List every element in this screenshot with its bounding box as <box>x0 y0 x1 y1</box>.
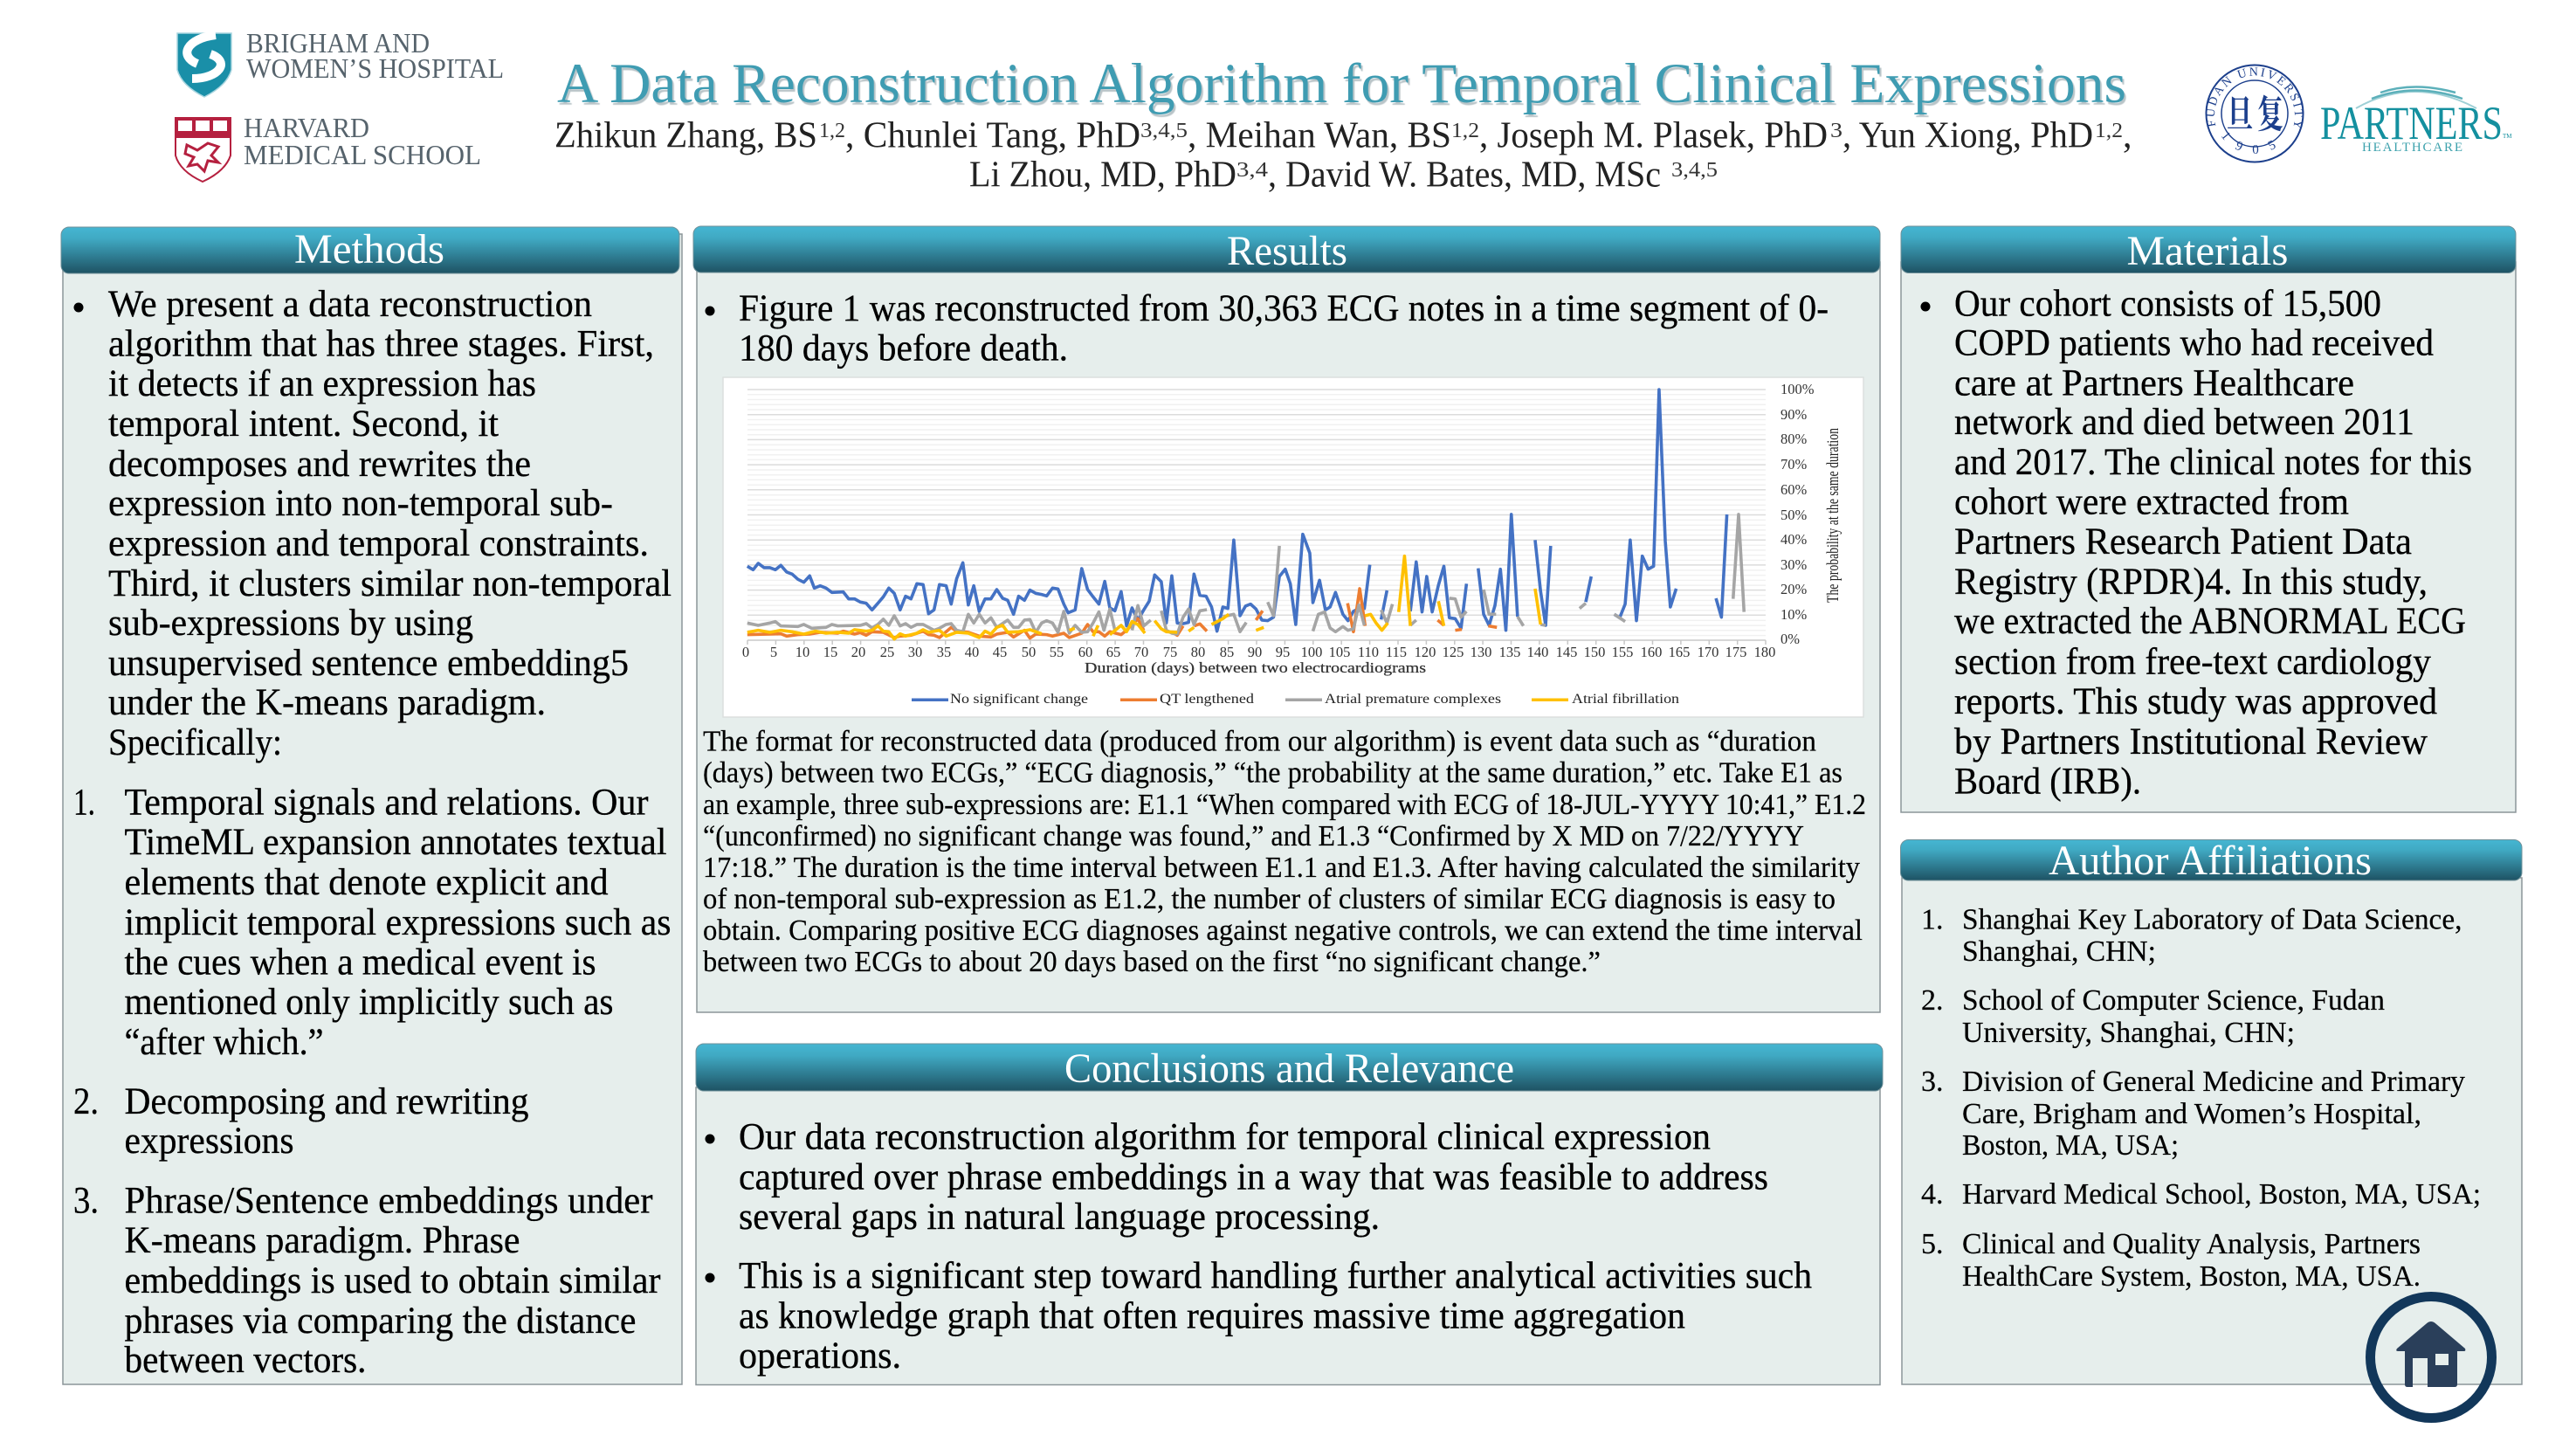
text block: item 3 embeddings: phrases via comparing the distance <box>124 1301 636 1342</box>
affiliation list: Division of General Medicine and Primary <box>1962 1066 2465 1098</box>
x axis: 10 <box>796 644 809 660</box>
text block: materials: Registry (RPDR)4. In this study, <box>1954 562 2428 603</box>
authors: 3,4 <box>1236 159 1268 182</box>
x axis: 160 <box>1641 644 1662 660</box>
x axis: 125 <box>1443 644 1464 660</box>
authors: 1,2 <box>2095 120 2123 142</box>
text block: results paragraph: between two ECGs to about 20 days based on the first “no significant change.” <box>703 946 1601 978</box>
heading: Methods <box>61 226 679 273</box>
panel: Methods <box>61 226 682 1384</box>
text block: methods intro: Specifically: <box>108 722 282 763</box>
text block: item 2 decomposing <box>73 1081 529 1162</box>
chart legend <box>912 692 1679 707</box>
logo: Harvard Medical School <box>175 112 481 182</box>
text block: conclusion one <box>706 1116 1768 1238</box>
x axis: 95 <box>1276 644 1290 660</box>
text block: results paragraph: (days) between two ECGs,” “ECG diagnosis,” “the probability at the same duration,” etc. Take E1 as <box>703 756 1842 790</box>
text block: results bullet: 180 days before death. <box>739 328 1068 369</box>
x axis: 150 <box>1584 644 1605 660</box>
authors: 3,4,5 <box>1671 159 1718 182</box>
panel: Materials <box>1901 226 2516 812</box>
logo: Brigham and Women's Hospital: WOMEN’S HOSPITAL <box>246 52 504 84</box>
authors: , Joseph M. Plasek, PhD <box>1479 115 1828 155</box>
text block: materials: care at Partners Healthcare <box>1954 363 2354 404</box>
authors: , David W. Bates, MD, MSc <box>1268 155 1661 196</box>
logo: Fudan University seal: FUDAN UNIVERSITY <box>2208 67 2302 128</box>
affiliation list: School of Computer Science, Fudan <box>1962 984 2385 1017</box>
x axis: 145 <box>1556 644 1577 660</box>
panel: Conclusions and Relevance <box>696 1044 1883 1385</box>
text block: conclusion two <box>706 1256 1812 1377</box>
logo: Partners HealthCare: TM <box>2503 133 2512 140</box>
text block: methods intro: it detects if an expression has <box>108 363 536 404</box>
affiliation list: 5. <box>1921 1228 1944 1260</box>
authors: , Yun Xiong, PhD <box>1842 115 2093 155</box>
authors: , Chunlei Tang, PhD <box>845 115 1140 155</box>
y axis: 20% <box>1780 581 1808 597</box>
text block: results paragraph: of non-temporal sub-expression as E1.2, the number of clusters of similar ECG diagnosis is easy to <box>703 883 1836 915</box>
x axis: 20 <box>851 644 865 660</box>
text block: conclusion one: captured over phrase embeddings in a way that was feasible to address <box>739 1156 1768 1198</box>
text block: materials: COPD patients who had received <box>1954 323 2434 363</box>
text block: materials: network and died between 2011 <box>1954 402 2414 443</box>
x axis: 15 <box>823 644 837 660</box>
affiliation list: Boston, MA, USA; <box>1962 1129 2179 1162</box>
text block: materials: Partners Research Patient Data <box>1954 521 2412 562</box>
text block: results paragraph: 17:18.” The duration is the time interval between E1.1 and E1.3. After having calculated the similarity <box>703 852 1860 884</box>
text block: materials <box>1921 283 2472 802</box>
text block: materials: and 2017. The clinical notes for this <box>1954 442 2472 483</box>
x axis: 35 <box>937 644 951 660</box>
logo: Fudan University seal: 旦 <box>2227 93 2253 136</box>
authors: Li Zhou, MD, PhD <box>969 155 1236 196</box>
x axis: 25 <box>880 644 894 660</box>
text block: methods intro: sub-expressions by using <box>108 603 473 644</box>
text block: item 3 embeddings: Phrase/Sentence embeddings under <box>124 1181 653 1221</box>
text block: conclusion one: several gaps in natural language processing. <box>739 1197 1380 1238</box>
y axis: The probability at the same duration <box>1824 428 1842 603</box>
y axis: 70% <box>1780 456 1808 473</box>
logo: Partners HealthCare: HEALTHCARE <box>2362 141 2462 155</box>
authors: Zhikun Zhang, BS <box>554 115 817 155</box>
y axis: 30% <box>1780 556 1808 573</box>
x axis: 100 <box>1301 644 1322 660</box>
logo: Harvard Medical School: HARVARD <box>244 112 369 143</box>
authors <box>554 115 2132 196</box>
text block: methods intro: algorithm that has three stages. First, <box>108 323 654 365</box>
x axis: 105 <box>1329 644 1350 660</box>
text block: item 1 temporal signals: the cues when a medical event is <box>124 942 596 983</box>
heading: Author Affiliations: Author Affiliations <box>2049 838 2372 884</box>
text block: methods intro: under the K-means paradigm. <box>108 682 546 723</box>
text block: item 3 embeddings: between vectors. <box>124 1340 367 1381</box>
affiliation list: 3. <box>1921 1066 1944 1098</box>
affiliation list: Shanghai, CHN; <box>1962 935 2156 968</box>
logo: Fudan University seal <box>2206 65 2304 162</box>
affiliation list: HealthCare System, Boston, MA, USA. <box>1962 1260 2421 1293</box>
logo: Harvard Medical School: MEDICAL SCHOOL <box>244 139 481 170</box>
affiliation list <box>1921 903 2481 1293</box>
title: A Data Reconstruction Algorithm for Temporal Clinical Expressions <box>557 52 2126 115</box>
text block: materials: by Partners Institutional Review <box>1954 721 2428 762</box>
affiliation list: 4. <box>1921 1178 1944 1211</box>
text block: item 3 embeddings: 3. <box>73 1181 99 1221</box>
affiliation list: Shanghai Key Laboratory of Data Science, <box>1962 903 2462 936</box>
text block: methods intro: expression and temporal constraints. <box>108 523 649 564</box>
line chart: probability by duration <box>723 377 1863 717</box>
logo: Fudan University seal: 复 <box>2257 93 2283 136</box>
x axis: 85 <box>1220 644 1234 660</box>
x axis: 165 <box>1669 644 1690 660</box>
x axis: 65 <box>1106 644 1120 660</box>
panel: Results <box>693 226 1880 1012</box>
text block: item 2 decomposing: expressions <box>124 1121 293 1162</box>
affiliation list: Clinical and Quality Analysis, Partners <box>1962 1228 2421 1260</box>
authors: , Meihan Wan, BS <box>1188 115 1451 155</box>
x axis: 5 <box>770 644 777 660</box>
chart legend: QT lengthened <box>1160 692 1254 707</box>
text block: results paragraph: an example, three sub-expressions are: E1.1 “When compared with ECG of 18-JUL-YYYY 10:41,” E1.2 <box>703 789 1866 821</box>
y axis: 10% <box>1780 606 1808 623</box>
affiliation list: University, Shanghai, CHN; <box>1962 1017 2295 1049</box>
icon: home button <box>2370 1296 2492 1418</box>
x axis: 50 <box>1022 644 1036 660</box>
heading: Author Affiliations <box>1900 838 2522 884</box>
y axis: 80% <box>1780 431 1808 447</box>
text block: methods intro: expression into non-temporal sub- <box>108 483 613 524</box>
text block: item 3 embeddings: K-means paradigm. Phrase <box>124 1220 520 1261</box>
text block: item 3 embeddings <box>73 1181 660 1381</box>
x axis: 115 <box>1386 644 1407 660</box>
logo: Brigham and Women's Hospital <box>177 27 504 97</box>
text block: item 3 embeddings: embeddings is used to obtain similar <box>124 1260 660 1301</box>
authors: , <box>2123 115 2132 155</box>
authors: 1,2 <box>819 120 845 142</box>
heading: Materials <box>1901 226 2516 274</box>
heading: Conclusions and Relevance: Conclusions and Relevance <box>1064 1045 1514 1092</box>
text block: methods intro: unsupervised sentence embedding5 <box>108 643 629 684</box>
y axis: 40% <box>1780 531 1808 548</box>
x axis: 155 <box>1612 644 1633 660</box>
y axis: 100% <box>1780 381 1815 397</box>
text block: results paragraph: The format for reconstructed data (produced from our algorithm) is event data such as “duration <box>703 725 1816 758</box>
affiliation list: 1. <box>1921 903 1944 936</box>
heading: Materials: Materials <box>2127 228 2288 274</box>
text block: item 1 temporal signals: elements that denote explicit and <box>124 862 608 903</box>
text block: results paragraph: obtain. Comparing positive ECG diagnoses against negative controls, we can extend the time interval <box>703 914 1863 947</box>
logo: Brigham and Women's Hospital: BRIGHAM AND <box>246 27 430 59</box>
heading: Results: Results <box>1227 228 1347 274</box>
x axis: 60 <box>1078 644 1092 660</box>
x axis: 135 <box>1499 644 1520 660</box>
text block: item 1 temporal signals: implicit temporal expressions such as <box>124 902 671 943</box>
chart legend: No significant change <box>950 692 1088 707</box>
y axis: 50% <box>1780 507 1808 523</box>
x axis: 120 <box>1415 644 1436 660</box>
affiliation list: Harvard Medical School, Boston, MA, USA; <box>1962 1178 2481 1211</box>
text block: results bullet: Figure 1 was reconstructed from 30,363 ECG notes in a time segment of 0- <box>739 288 1829 329</box>
x axis: 70 <box>1134 644 1148 660</box>
text block: item 1 temporal signals: TimeML expansion annotates textual <box>124 822 667 863</box>
text block: materials: Board (IRB). <box>1954 762 2141 802</box>
text block: item 1 temporal signals: mentioned only implicitly such as <box>124 982 613 1023</box>
series: lines <box>747 390 1744 639</box>
x axis: 140 <box>1527 644 1548 660</box>
text block: item 1 temporal signals: “after which.” <box>124 1022 323 1063</box>
text block: methods intro: We present a data reconstruction <box>108 284 592 325</box>
x axis: 45 <box>993 644 1007 660</box>
authors: 3 <box>1830 120 1842 142</box>
affiliation list: Care, Brigham and Women’s Hospital, <box>1962 1098 2421 1130</box>
y axis <box>1780 381 1842 647</box>
x axis: 55 <box>1050 644 1064 660</box>
x axis <box>742 640 1775 676</box>
panel: Author Affiliations <box>1900 838 2522 1384</box>
text block: materials: we extracted the ABNORMAL ECG <box>1954 601 2466 642</box>
y axis: 90% <box>1780 406 1808 423</box>
x axis: 75 <box>1163 644 1177 660</box>
logo: Fudan University seal: 1905 <box>2221 133 2276 154</box>
text block: results paragraph <box>703 725 1866 978</box>
y axis: 60% <box>1780 481 1808 498</box>
x axis: 0 <box>742 644 749 660</box>
heading: Conclusions and Relevance <box>696 1044 1883 1092</box>
text block: item 1 temporal signals <box>73 783 671 1063</box>
text block: methods intro: Third, it clusters similar non-temporal <box>108 563 672 604</box>
affiliation list: 2. <box>1921 984 1944 1017</box>
text block: item 2 decomposing: 2. <box>73 1081 99 1122</box>
text block: materials: Our cohort consists of 15,500 <box>1954 283 2381 325</box>
x axis: 130 <box>1471 644 1491 660</box>
text block: results bullet <box>706 288 1829 369</box>
x axis: Duration (days) between two electrocardiograms <box>1085 659 1426 676</box>
text block: conclusion one: Our data reconstruction algorithm for temporal clinical expression <box>739 1116 1711 1158</box>
text block: results paragraph: “(unconfirmed) no significant change was found,” and E1.3 “Confirmed by X MD on 7/22/YYYY <box>703 820 1804 852</box>
text block: materials: cohort were extracted from <box>1954 482 2349 522</box>
authors: 1,2 <box>1451 120 1479 142</box>
text block: conclusion two: operations. <box>739 1335 901 1377</box>
heading: Results <box>693 226 1880 274</box>
text block: methods intro: decomposes and rewrites the <box>108 444 531 485</box>
x axis: 90 <box>1248 644 1262 660</box>
logo: Partners HealthCare <box>2320 87 2512 155</box>
text block: item 2 decomposing: Decomposing and rewriting <box>124 1081 529 1122</box>
x axis: 40 <box>965 644 979 660</box>
text block: conclusion two: as knowledge graph that often requires massive time aggregation <box>739 1296 1685 1336</box>
text block: materials: reports. This study was approved <box>1954 681 2437 722</box>
x axis: 30 <box>908 644 922 660</box>
x axis: 80 <box>1191 644 1205 660</box>
x axis: 180 <box>1754 644 1775 660</box>
text block: methods intro: temporal intent. Second, it <box>108 404 499 445</box>
logo: Partners HealthCare: PARTNERS <box>2320 97 2503 149</box>
chart legend: Atrial premature complexes <box>1325 692 1501 707</box>
text block: materials: section from free-text cardiology <box>1954 641 2431 683</box>
authors: 3,4,5 <box>1140 120 1188 142</box>
heading: Methods: Methods <box>294 226 444 273</box>
x axis: 110 <box>1358 644 1379 660</box>
text block: item 1 temporal signals: 1. <box>73 783 95 823</box>
x axis: 175 <box>1725 644 1746 660</box>
chart legend: Atrial fibrillation <box>1572 692 1679 707</box>
y axis: 0% <box>1780 631 1800 647</box>
text block: conclusion two: This is a significant step toward handling further analytical activities such <box>739 1256 1812 1296</box>
text block: item 1 temporal signals: Temporal signals and relations. Our <box>124 783 648 823</box>
text block: methods intro <box>73 284 672 763</box>
x axis: 170 <box>1698 644 1718 660</box>
